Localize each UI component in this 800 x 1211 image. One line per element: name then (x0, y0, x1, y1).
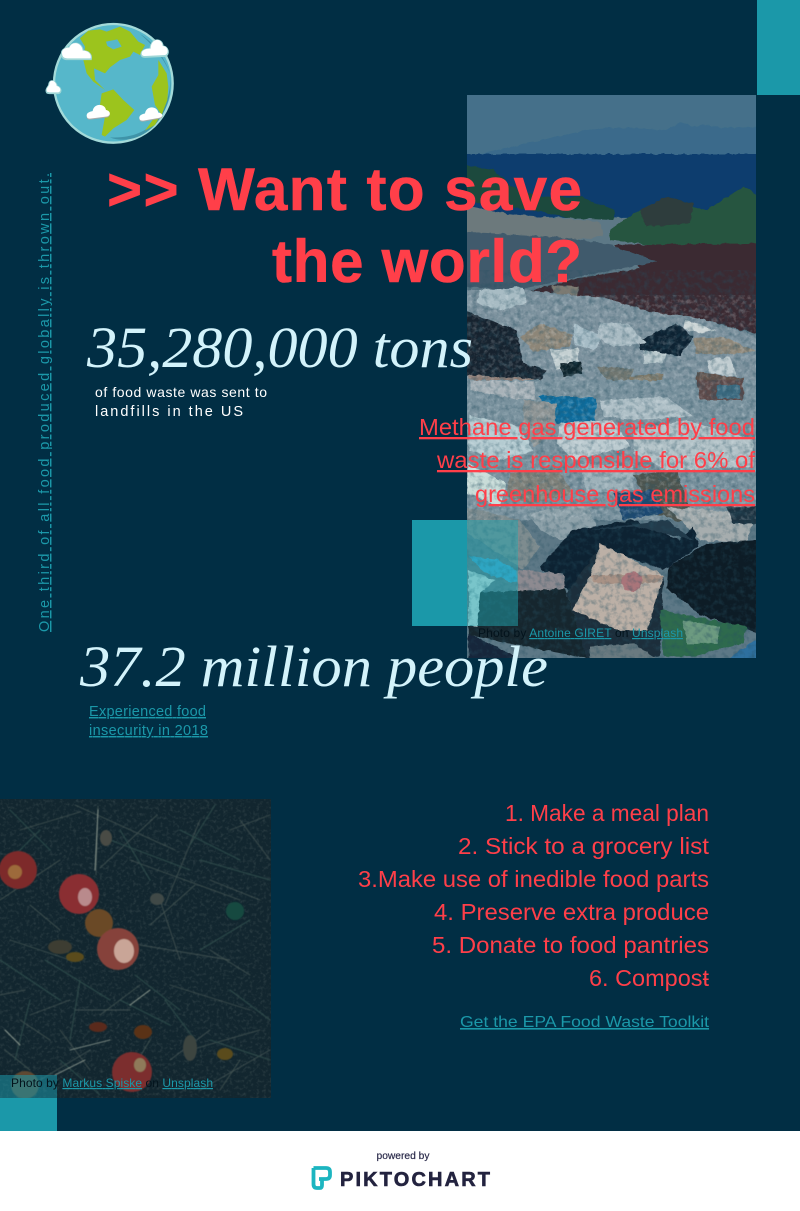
action list: 2. Stick to a grocery list (458, 833, 710, 859)
title: >> Want to save (107, 156, 582, 223)
action list: 4. Preserve extra produce (434, 899, 709, 925)
photo credit: apples: Photo by Markus Spiske on Unsplash (11, 1076, 213, 1090)
photo credit: landfill: Photo by Antoine GIRET on Unsplash (478, 626, 683, 640)
callout: methane gas: Methane gas generated by food (419, 414, 755, 440)
photo: landfill by the sea (463, 90, 763, 660)
action list: 3.Make use of inedible food parts (358, 866, 709, 892)
link: EPA toolkit: Get the EPA Food Waste Toolkit (460, 1014, 710, 1031)
callout: methane gas (419, 414, 756, 507)
teal corner block (757, 0, 800, 95)
stat: people with food insecurity: insecurity in 2018 (89, 723, 208, 739)
icon: piktochart logo (314, 1168, 330, 1188)
icon: globe with clouds (47, 24, 173, 143)
stat: people with food insecurity: Experienced food (89, 704, 206, 720)
stat: tons of food waste: landfills in the US (95, 404, 243, 420)
teal block at lower left (0, 1075, 57, 1131)
stat: tons of food waste (86, 315, 473, 420)
callout: methane gas: greenhouse gas emissions (475, 481, 755, 507)
footer band (0, 1131, 800, 1211)
stat: tons of food waste: of food waste was sent to (95, 384, 267, 400)
title: the world? (272, 228, 582, 295)
callout: methane gas: waste is responsible for 6% of (436, 447, 756, 473)
action list: 1. Make a meal plan (505, 800, 709, 826)
apples (0, 830, 244, 1099)
piktochart wordmark: PIKTOCHART (340, 1169, 490, 1191)
vertical text: one third of food: One third of all food produced globally is thrown out. (37, 173, 53, 632)
action list (358, 800, 710, 991)
trash texture (467, 270, 756, 658)
stat: tons of food waste: 35,280,000 tons (86, 315, 473, 380)
action list: 6. Composŧ (589, 965, 710, 991)
photo: rotting apples on the ground (0, 799, 271, 1099)
stat: people with food insecurity (79, 634, 548, 739)
powered by label: powered by (376, 1150, 430, 1162)
teal square overlapping the landfill photo (412, 520, 518, 626)
action list: 5. Donate to food pantries (432, 932, 709, 958)
stat: people with food insecurity: 37.2 million people (79, 634, 548, 699)
title (107, 156, 582, 295)
